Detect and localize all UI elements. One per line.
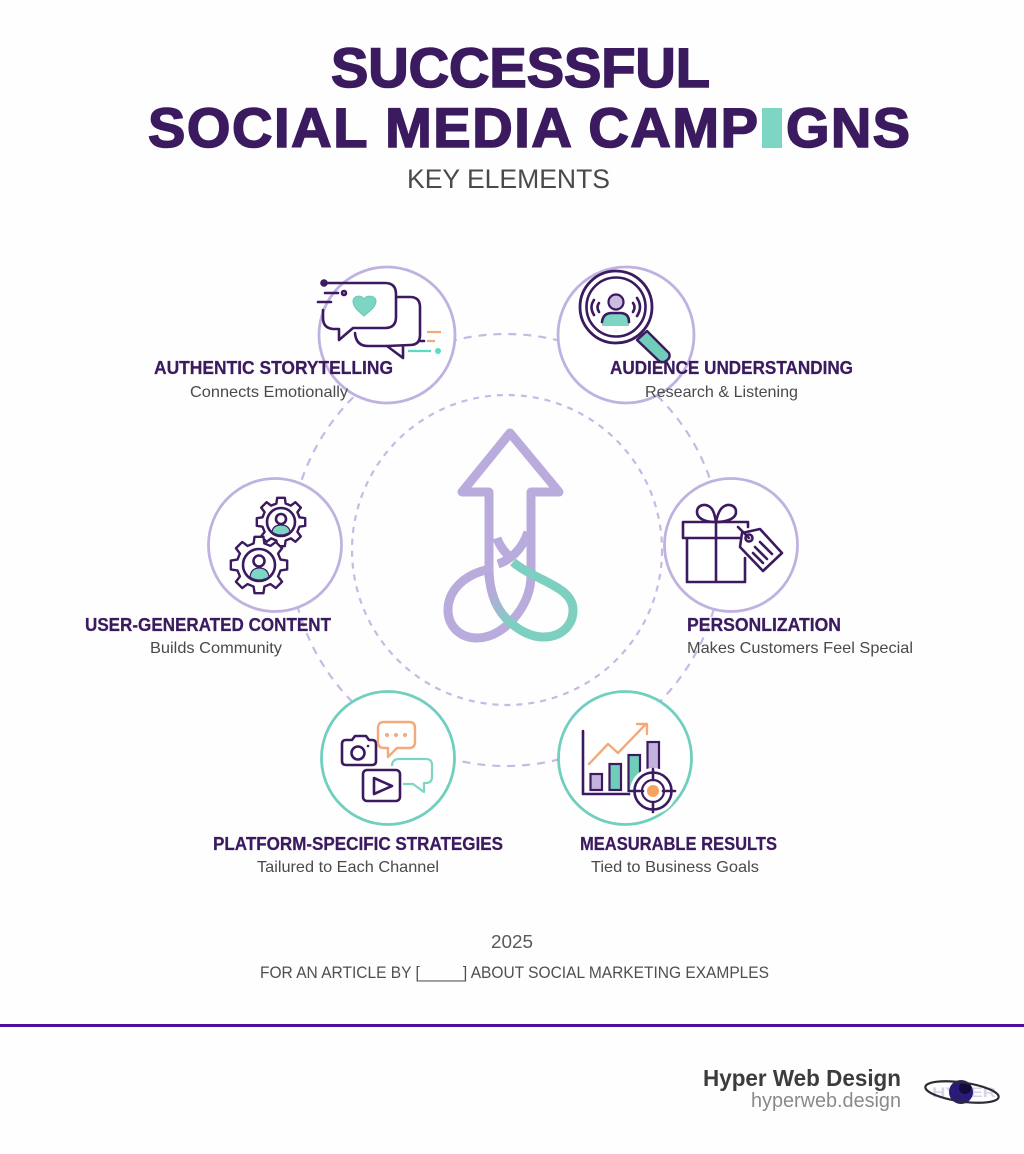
brand name: Hyper Web Design	[703, 1065, 901, 1091]
panel: audience understanding	[558, 267, 853, 403]
description: Tailured to Each Channel	[257, 859, 439, 876]
brand url: hyperweb.design	[751, 1090, 901, 1112]
description: Builds Community	[150, 640, 282, 657]
icon: brand logo	[924, 1077, 1000, 1107]
icon: gears with people	[231, 498, 305, 593]
icon: bar chart with target	[583, 724, 676, 814]
title: GNS	[786, 96, 910, 159]
panel: measurable results	[558, 692, 777, 876]
icon: brand logo: HYPER	[932, 1084, 996, 1100]
icon: camera, video and chat bubbles	[342, 722, 432, 801]
panel: platform-specific strategies	[213, 692, 503, 876]
description: Makes Customers Feel Special	[687, 640, 913, 657]
footer divider	[0, 1024, 1024, 1027]
central arrow and loop icon	[448, 433, 573, 638]
title: SOCIAL MEDIA CAMP	[148, 96, 758, 159]
heading: USER-GENERATED CONTENT	[85, 615, 331, 635]
heading: MEASURABLE RESULTS	[580, 834, 777, 854]
inner dashed ring	[352, 395, 662, 705]
panel: user-generated content	[85, 478, 342, 657]
description: Connects Emotionally	[190, 384, 348, 401]
description: Tied to Business Goals	[591, 859, 759, 876]
outer dashed ring	[290, 334, 722, 766]
year: 2025	[491, 931, 533, 952]
heading: AUDIENCE UNDERSTANDING	[610, 358, 853, 378]
icon: magnifier with person	[580, 271, 670, 362]
subtitle: KEY ELEMENTS	[407, 164, 610, 194]
icon: gift box with tag	[683, 505, 782, 582]
icon: chat bubbles with heart	[318, 280, 441, 358]
title	[148, 36, 910, 159]
heading: PERSONLIZATION	[687, 615, 841, 635]
panel: authentic storytelling	[154, 267, 455, 403]
title: SUCCESSFUL	[331, 36, 710, 99]
heading: PLATFORM-SPECIFIC STRATEGIES	[213, 834, 503, 854]
source note: FOR AN ARTICLE BY [_____] ABOUT SOCIAL MARKETING EXAMPLES	[260, 964, 769, 982]
panel: personalization	[664, 478, 913, 657]
heading: AUTHENTIC STORYTELLING	[154, 358, 393, 378]
description: Research & Listening	[645, 384, 798, 401]
